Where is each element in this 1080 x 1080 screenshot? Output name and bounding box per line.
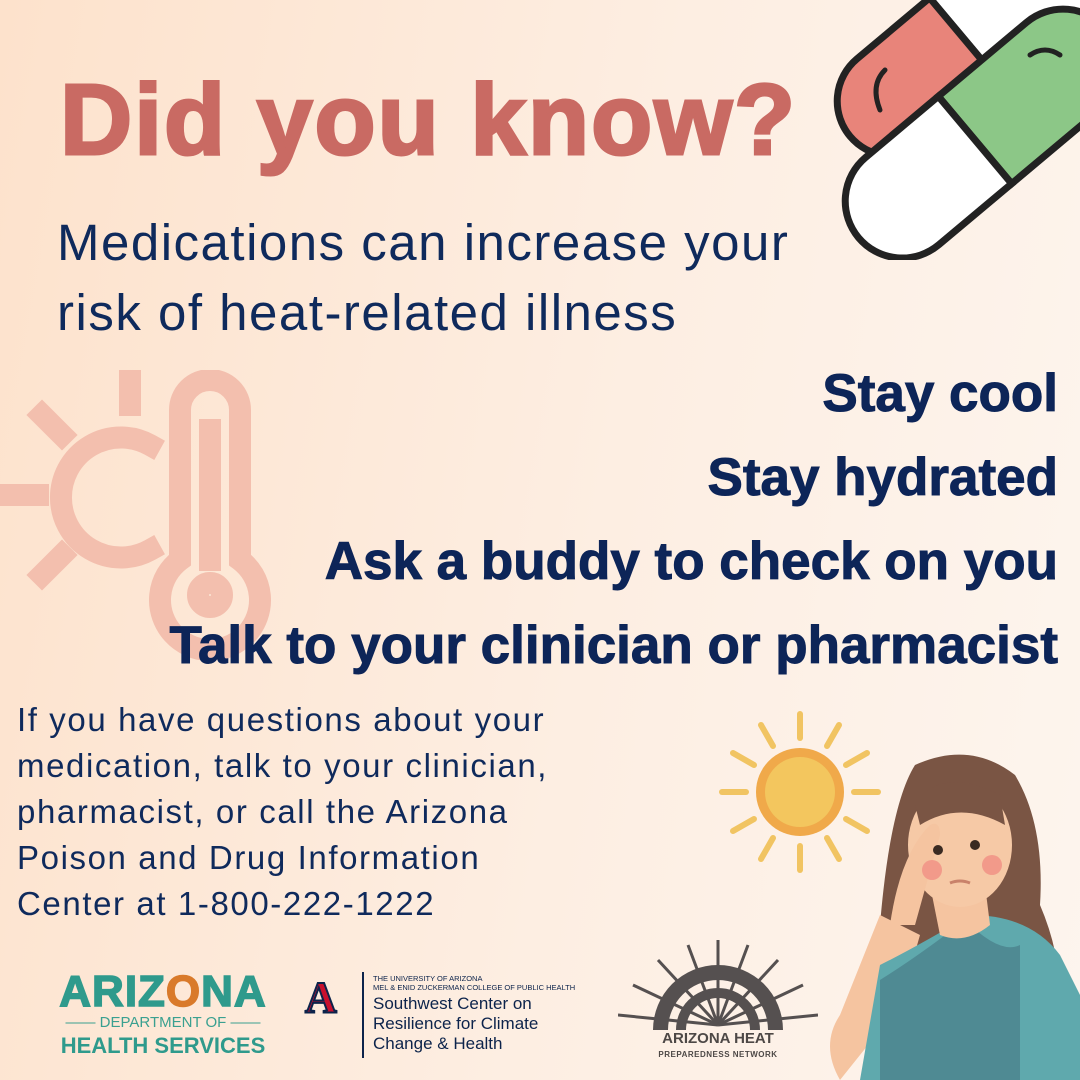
subtitle: risk of heat-related illness bbox=[57, 284, 677, 341]
tips list: Stay cool bbox=[822, 364, 1058, 423]
title: Did you know? bbox=[60, 64, 797, 176]
subtitle: Medications can increase your bbox=[57, 214, 789, 271]
body text: pharmacist, or call the Arizona bbox=[17, 793, 509, 830]
tips list bbox=[170, 364, 1058, 675]
logo: University of Arizona SWCRCH: Southwest Center on bbox=[373, 994, 532, 1013]
body text: If you have questions about your bbox=[17, 701, 545, 738]
logo: University of Arizona SWCRCH: A bbox=[305, 973, 337, 1022]
body text bbox=[17, 701, 548, 922]
icon: thermometer and sun outline bbox=[0, 370, 271, 660]
icon: pills bbox=[834, 0, 1080, 260]
logo: Arizona Heat Preparedness Network: ARIZONA HEAT bbox=[662, 1030, 774, 1047]
logo: University of Arizona SWCRCH: Change & Health bbox=[373, 1034, 502, 1053]
logo: University of Arizona SWCRCH: Resilience for Climate bbox=[373, 1014, 538, 1033]
logo: Arizona Heat Preparedness Network: PREPAREDNESS NETWORK bbox=[658, 1050, 778, 1059]
logo: Arizona Department of Health Services: ARIZONA bbox=[59, 967, 267, 1016]
logo: University of Arizona SWCRCH: THE UNIVERSITY OF ARIZONA bbox=[373, 974, 482, 983]
tips list: Ask a buddy to check on you bbox=[325, 532, 1058, 591]
icon: sun bbox=[719, 711, 881, 873]
body text: Center at 1-800-222-1222 bbox=[17, 885, 435, 922]
subtitle bbox=[57, 214, 789, 341]
tips list: Talk to your clinician or pharmacist bbox=[170, 616, 1058, 675]
logo: University of Arizona SWCRCH bbox=[304, 972, 575, 1058]
body text: Poison and Drug Information bbox=[17, 839, 480, 876]
logo: Arizona Heat Preparedness Network bbox=[618, 940, 818, 1059]
body text: medication, talk to your clinician, bbox=[17, 747, 548, 784]
logo: Arizona Department of Health Services: —— DEPARTMENT OF —— bbox=[65, 1014, 260, 1031]
logo: Arizona Department of Health Services: HEALTH SERVICES bbox=[61, 1033, 265, 1058]
logo: University of Arizona SWCRCH: MEL & ENID ZUCKERMAN COLLEGE OF PUBLIC HEALTH bbox=[373, 983, 575, 992]
logo: Arizona Department of Health Services bbox=[59, 967, 267, 1058]
tips list: Stay hydrated bbox=[707, 448, 1058, 507]
illustration: woman bbox=[830, 754, 1080, 1080]
